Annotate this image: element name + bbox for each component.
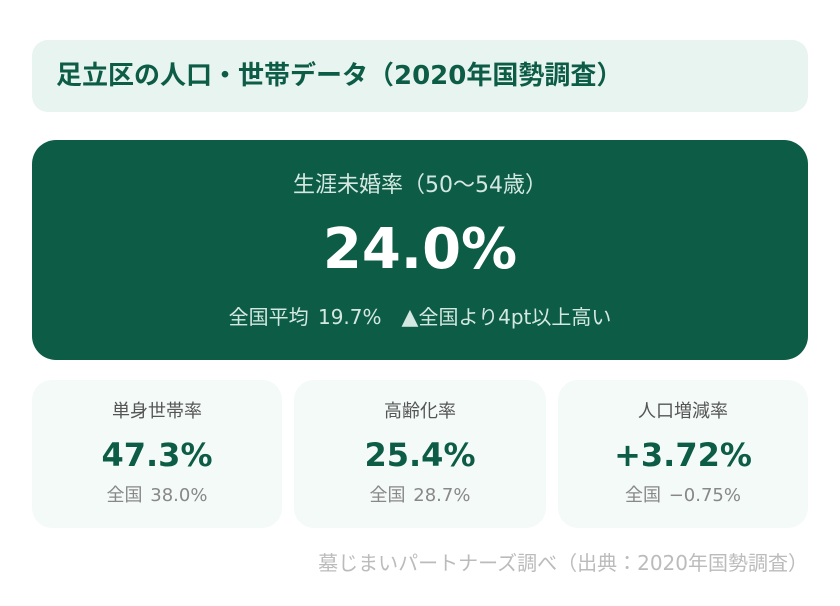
label: 高齢化率 — [384, 401, 456, 422]
main statistic value: 24.0% — [323, 217, 517, 282]
panel: population change — [558, 380, 808, 528]
national comparison: 全国 38.0% — [107, 485, 207, 506]
label: 単身世帯率 — [112, 401, 202, 422]
panel: single-person households — [32, 380, 282, 528]
main statistic comparison: 全国平均 19.7% 全国より4pt以上高い — [229, 305, 611, 329]
source note: 墓じまいパートナーズ調べ（出典：2020年国勢調査） — [318, 551, 808, 575]
value: +3.72% — [614, 436, 752, 474]
title panel — [32, 40, 808, 112]
main statistic comparison: ▲ — [402, 305, 418, 330]
main statistic label: 生涯未婚率（50～54歳） — [293, 173, 547, 198]
national comparison: 全国 −0.75% — [625, 485, 741, 506]
label: 人口増減率 — [638, 401, 728, 422]
value: 25.4% — [364, 436, 476, 474]
panel: aging rate — [294, 380, 546, 528]
value: 47.3% — [101, 436, 212, 474]
panel: main statistic — [32, 140, 808, 360]
national comparison: 全国 28.7% — [370, 485, 470, 506]
title: 足立区の人口・世帯データ（2020年国勢調査） — [56, 61, 622, 91]
